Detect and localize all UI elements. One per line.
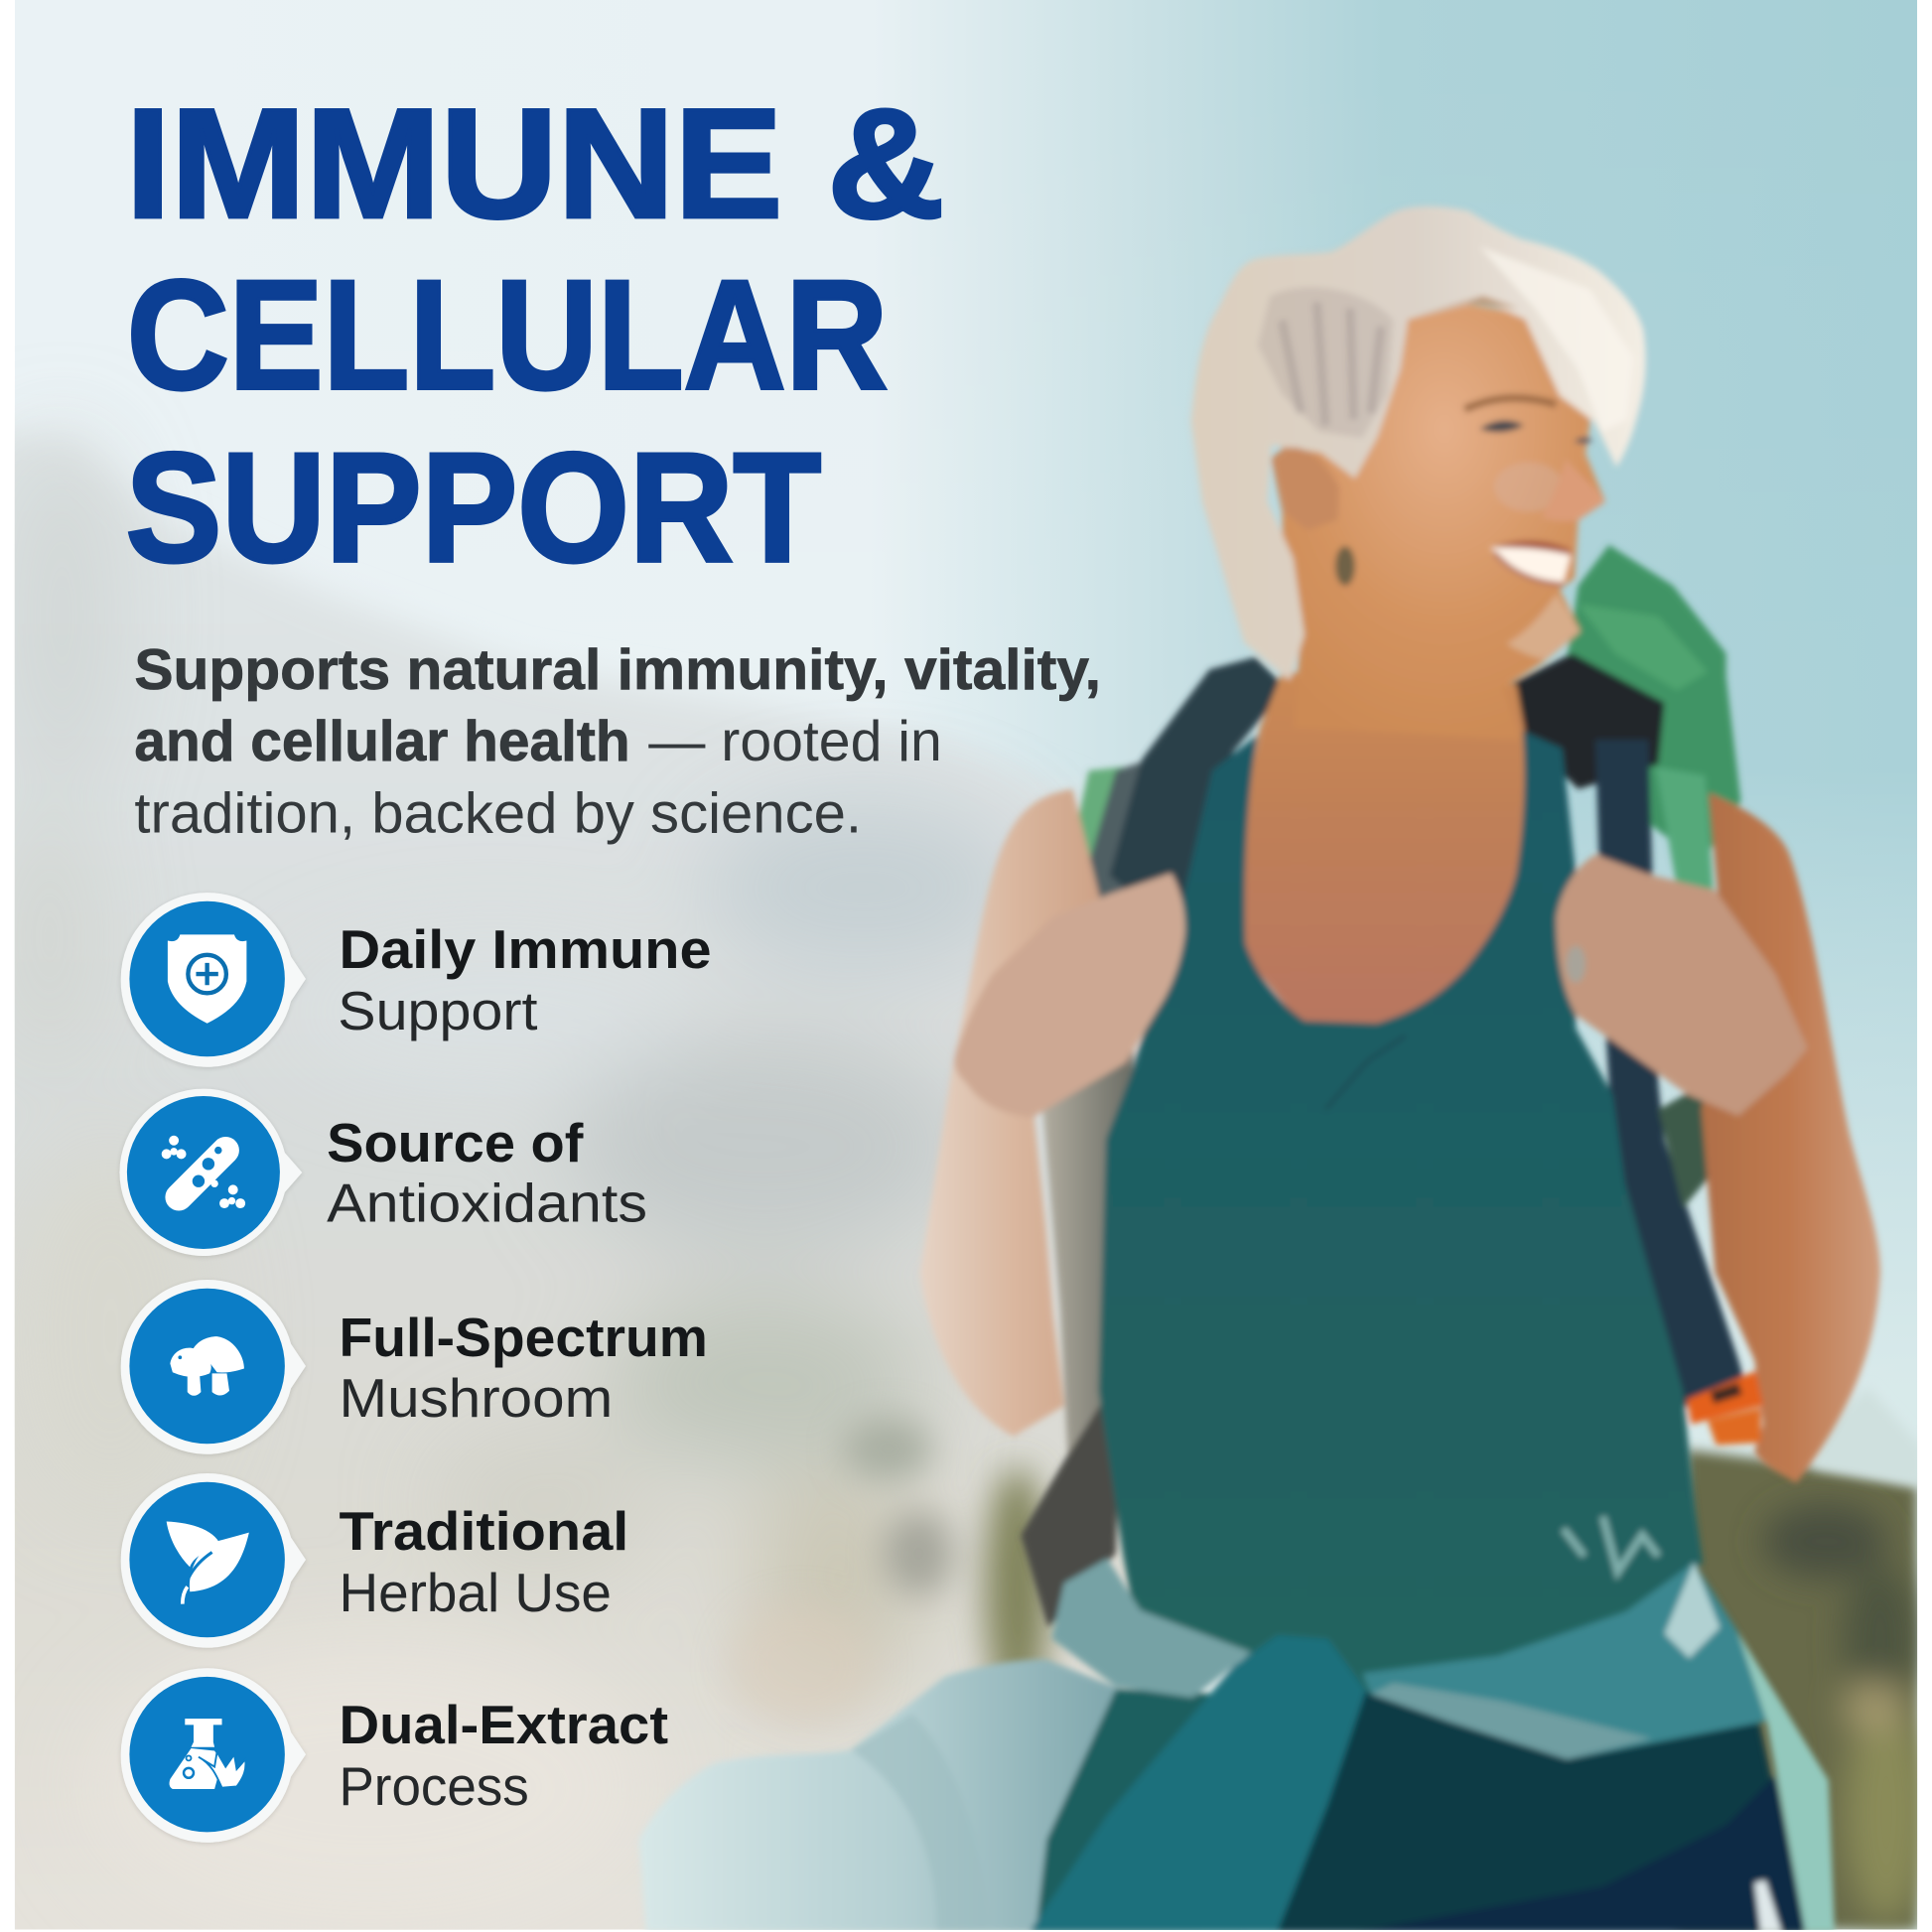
title: IMMUNE & [126, 77, 944, 251]
left arm [919, 789, 1110, 1437]
chest and neck [1239, 672, 1526, 1030]
feature: full-spectrum mushroom: Mushroom [340, 1368, 613, 1429]
feature: daily immune support: Daily Immune [340, 919, 712, 980]
intro text [134, 638, 1101, 845]
ear [1271, 448, 1339, 530]
face [1283, 296, 1605, 740]
title: SUPPORT [126, 421, 821, 595]
head: hair, face [1191, 207, 1645, 740]
right arm [1702, 793, 1880, 1483]
title: CELLULAR [127, 248, 888, 422]
pale hanging sleeve [638, 1659, 1123, 1932]
feature: daily immune support: Support [338, 981, 537, 1041]
feature: full-spectrum mushroom [121, 1280, 708, 1454]
feature: source of antioxidants: Source of [327, 1113, 584, 1173]
smile [1490, 541, 1571, 585]
feature: traditional herbal use [121, 1473, 628, 1648]
feature: full-spectrum mushroom: Full-Spectrum [340, 1308, 708, 1368]
feature: traditional herbal use: Herbal Use [340, 1563, 612, 1623]
feature: source of antioxidants: Antioxidants [327, 1173, 647, 1234]
feature: daily immune support [121, 893, 712, 1067]
intro text: and cellular health [134, 710, 630, 773]
intro text: Supports natural immunity, vitality, [134, 638, 1101, 702]
tank top [1099, 731, 1703, 1702]
feature: traditional herbal use: Traditional [340, 1501, 628, 1562]
woman hiker [638, 207, 1880, 1932]
hair [1191, 207, 1645, 681]
waist scarf [638, 1559, 1835, 1932]
feature: dual-extract process: Process [340, 1756, 529, 1817]
backpack [1021, 545, 1750, 1627]
icon: leaves [121, 1473, 306, 1648]
feature: dual-extract process [121, 1668, 668, 1843]
eyes and brow [1464, 398, 1592, 444]
icon: shield [121, 893, 306, 1067]
intro text: — rooted in [648, 710, 942, 773]
nose [1541, 459, 1605, 521]
feature: source of antioxidants [119, 1089, 647, 1256]
feature: dual-extract process: Dual-Extract [340, 1695, 668, 1755]
orange buckle [1687, 1371, 1763, 1445]
title [126, 77, 944, 595]
icon: capsule with molecules [119, 1089, 302, 1256]
intro text: tradition, backed by science. [134, 781, 862, 845]
wedding ring [1566, 946, 1586, 983]
icon: mushrooms [121, 1280, 306, 1454]
pants [1270, 1689, 1805, 1932]
hands [955, 873, 1185, 1117]
icon: flask with herb [121, 1668, 306, 1843]
earring [1335, 546, 1355, 586]
